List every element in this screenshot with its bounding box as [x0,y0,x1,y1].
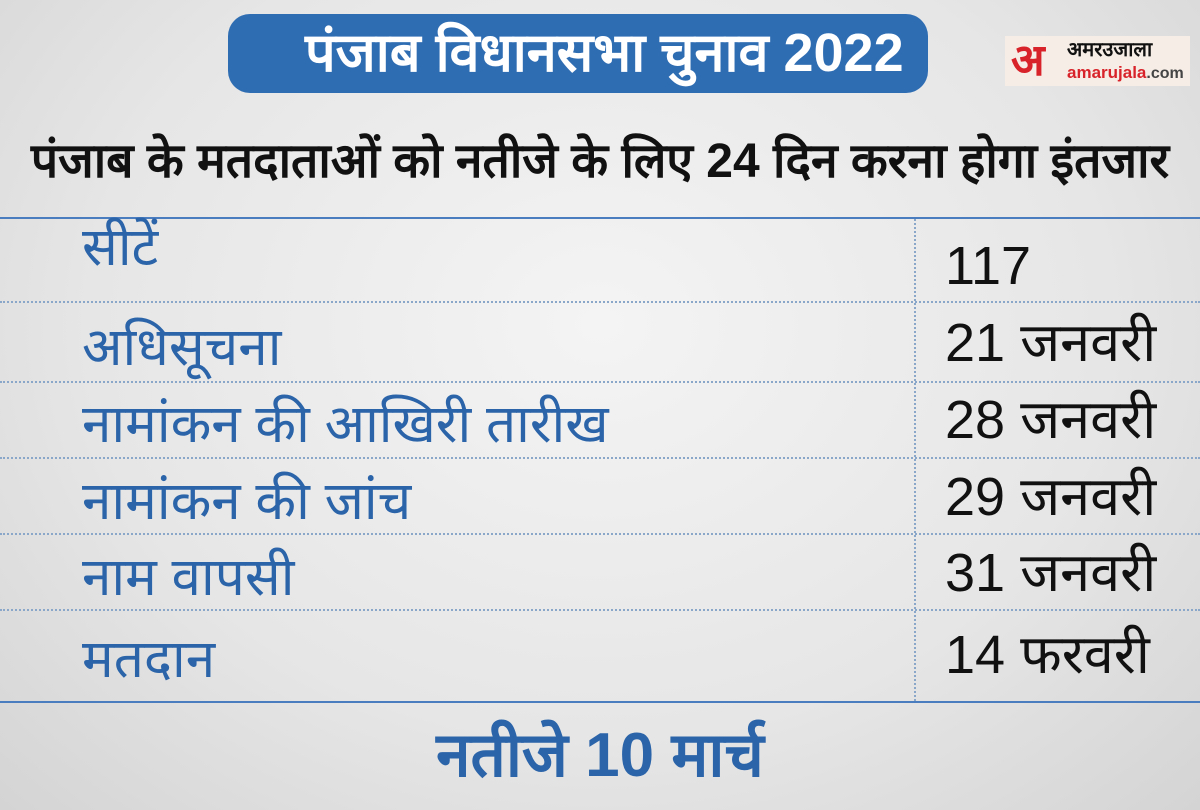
row: seats [82,218,1031,296]
logo text: amarujala.com [1067,63,1184,82]
row: withdrawal [82,542,1157,607]
logo [1005,36,1190,86]
logo text [1067,39,1184,82]
row: notification: 21 जनवरी [945,313,1156,373]
table [0,217,1200,703]
row: scrutiny: नामांकन की जांच [82,472,411,531]
row: seats: 117 [945,236,1031,296]
row: notification [82,312,1157,380]
row: nomination last date [82,390,1157,454]
subtitle: पंजाब के मतदाताओं को नतीजे के लिए 24 दिन करना होगा इंतजार [31,135,1169,188]
row: voting [82,624,1151,689]
title [228,14,928,93]
row: withdrawal: 31 जनवरी [945,543,1156,603]
row: scrutiny [82,466,1157,531]
row: seats: सीटें [82,218,158,277]
row: nomination last date: नामांकन की आखिरी तारीख [82,395,609,454]
row: scrutiny: 29 जनवरी [945,467,1156,527]
logo mark: अ [1011,36,1045,85]
title: पंजाब विधानसभा चुनाव 2022 [305,23,904,83]
footer result: नतीजे 10 मार्च [436,721,764,790]
row: voting: मतदान [82,630,215,689]
row: notification: अधिसूचना [82,318,281,377]
row: voting: 14 फरवरी [945,625,1150,685]
row: withdrawal: नाम वापसी [82,548,294,607]
row: nomination last date: 28 जनवरी [945,390,1156,450]
logo text: अमरउजाला [1067,39,1152,61]
